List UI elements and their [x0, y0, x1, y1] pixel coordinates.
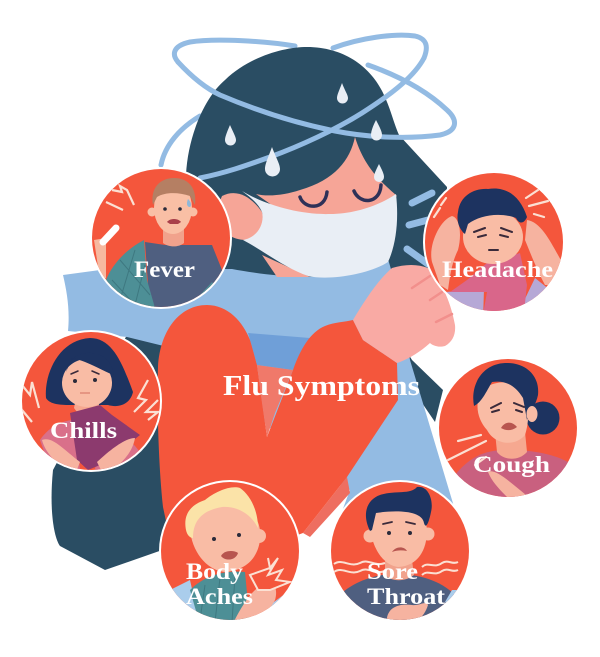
cough neck [495, 432, 527, 459]
sore throat hand [387, 603, 428, 625]
sore throat wavy lines [334, 561, 458, 575]
hair lower back right [400, 340, 443, 422]
headache jacket [446, 278, 546, 310]
cough lines [448, 435, 486, 465]
symptom circle: Sore Throat [329, 480, 471, 625]
body aches pain burst [250, 558, 290, 590]
sore throat head [370, 505, 427, 567]
hand on chest [353, 265, 455, 363]
headache pain lines [434, 190, 548, 217]
headache head [463, 210, 523, 264]
sore throat neck [385, 560, 414, 580]
scarf and light blue garment [63, 259, 455, 560]
chills neck [74, 404, 99, 412]
body aches label [186, 559, 253, 609]
body aches face details [212, 537, 216, 541]
fever label: Fever [134, 257, 195, 282]
fever neck [163, 228, 184, 246]
body aches label: Aches [186, 584, 253, 609]
cough face details [491, 403, 524, 412]
fever arm and thermometer [94, 238, 106, 280]
dizzy rings in front of hair [178, 58, 455, 178]
cough label: Cough [473, 452, 550, 477]
body aches head [190, 504, 260, 572]
symptom circle: Cough [439, 359, 577, 497]
headache arms and hands [431, 216, 460, 290]
sweater fold [257, 365, 293, 437]
ear [214, 193, 263, 240]
hair lower back left [52, 325, 175, 570]
fever spikes [106, 186, 134, 210]
chills sleeves [40, 420, 139, 470]
sore throat label [367, 559, 445, 609]
sore throat shirt [343, 573, 455, 625]
cough bun [526, 402, 560, 434]
sore throat label: Sore [367, 559, 418, 584]
title: Flu Symptoms [223, 370, 420, 402]
headache scarf [450, 253, 527, 311]
cough ear [526, 406, 538, 422]
symptom circle: Headache [423, 171, 565, 320]
sore throat hair [366, 487, 432, 531]
chills lightning [22, 380, 158, 422]
sore throat label: Throat [367, 584, 445, 609]
sweat drops [225, 83, 384, 182]
symptom circle: Body Aches [159, 480, 301, 625]
headache label: Headache [442, 257, 553, 282]
red sweater arms [158, 305, 398, 560]
fever face details [163, 207, 167, 211]
fever head [154, 193, 192, 234]
symptom circle: Chills [20, 330, 162, 480]
body aches label: Body [186, 559, 244, 584]
hair [186, 47, 447, 290]
chills hands [42, 439, 80, 468]
face mask [242, 191, 397, 278]
sore throat face details [387, 531, 391, 535]
face [256, 137, 397, 226]
neck skin [262, 255, 310, 277]
sweater lower pink panel [303, 477, 350, 537]
cough hand [488, 471, 526, 497]
cough hair [473, 363, 538, 420]
closed eyes [300, 185, 381, 206]
cough lines [407, 193, 432, 264]
body aches shirt [190, 572, 250, 625]
dizzy rings behind hair [161, 35, 426, 165]
fever hair [152, 178, 195, 205]
central figure: woman with mask [52, 35, 455, 570]
sore throat pale sleeve [445, 590, 460, 606]
chills label: Chills [50, 418, 117, 443]
body aches pale background shapes [172, 580, 283, 612]
chills head [62, 359, 112, 407]
fever person body [145, 242, 224, 312]
headache hair [457, 188, 527, 234]
headache face details [474, 228, 512, 250]
chills scarf [70, 405, 140, 470]
cough head [477, 382, 528, 443]
body aches arm [232, 582, 276, 625]
fever teal sleeve [106, 240, 155, 308]
chills hair [46, 338, 133, 406]
darker blue between arms [248, 333, 310, 370]
cough shirt [456, 450, 568, 497]
chills face details [73, 379, 77, 383]
symptom circle: Fever [90, 167, 232, 312]
body aches hair [185, 487, 258, 538]
